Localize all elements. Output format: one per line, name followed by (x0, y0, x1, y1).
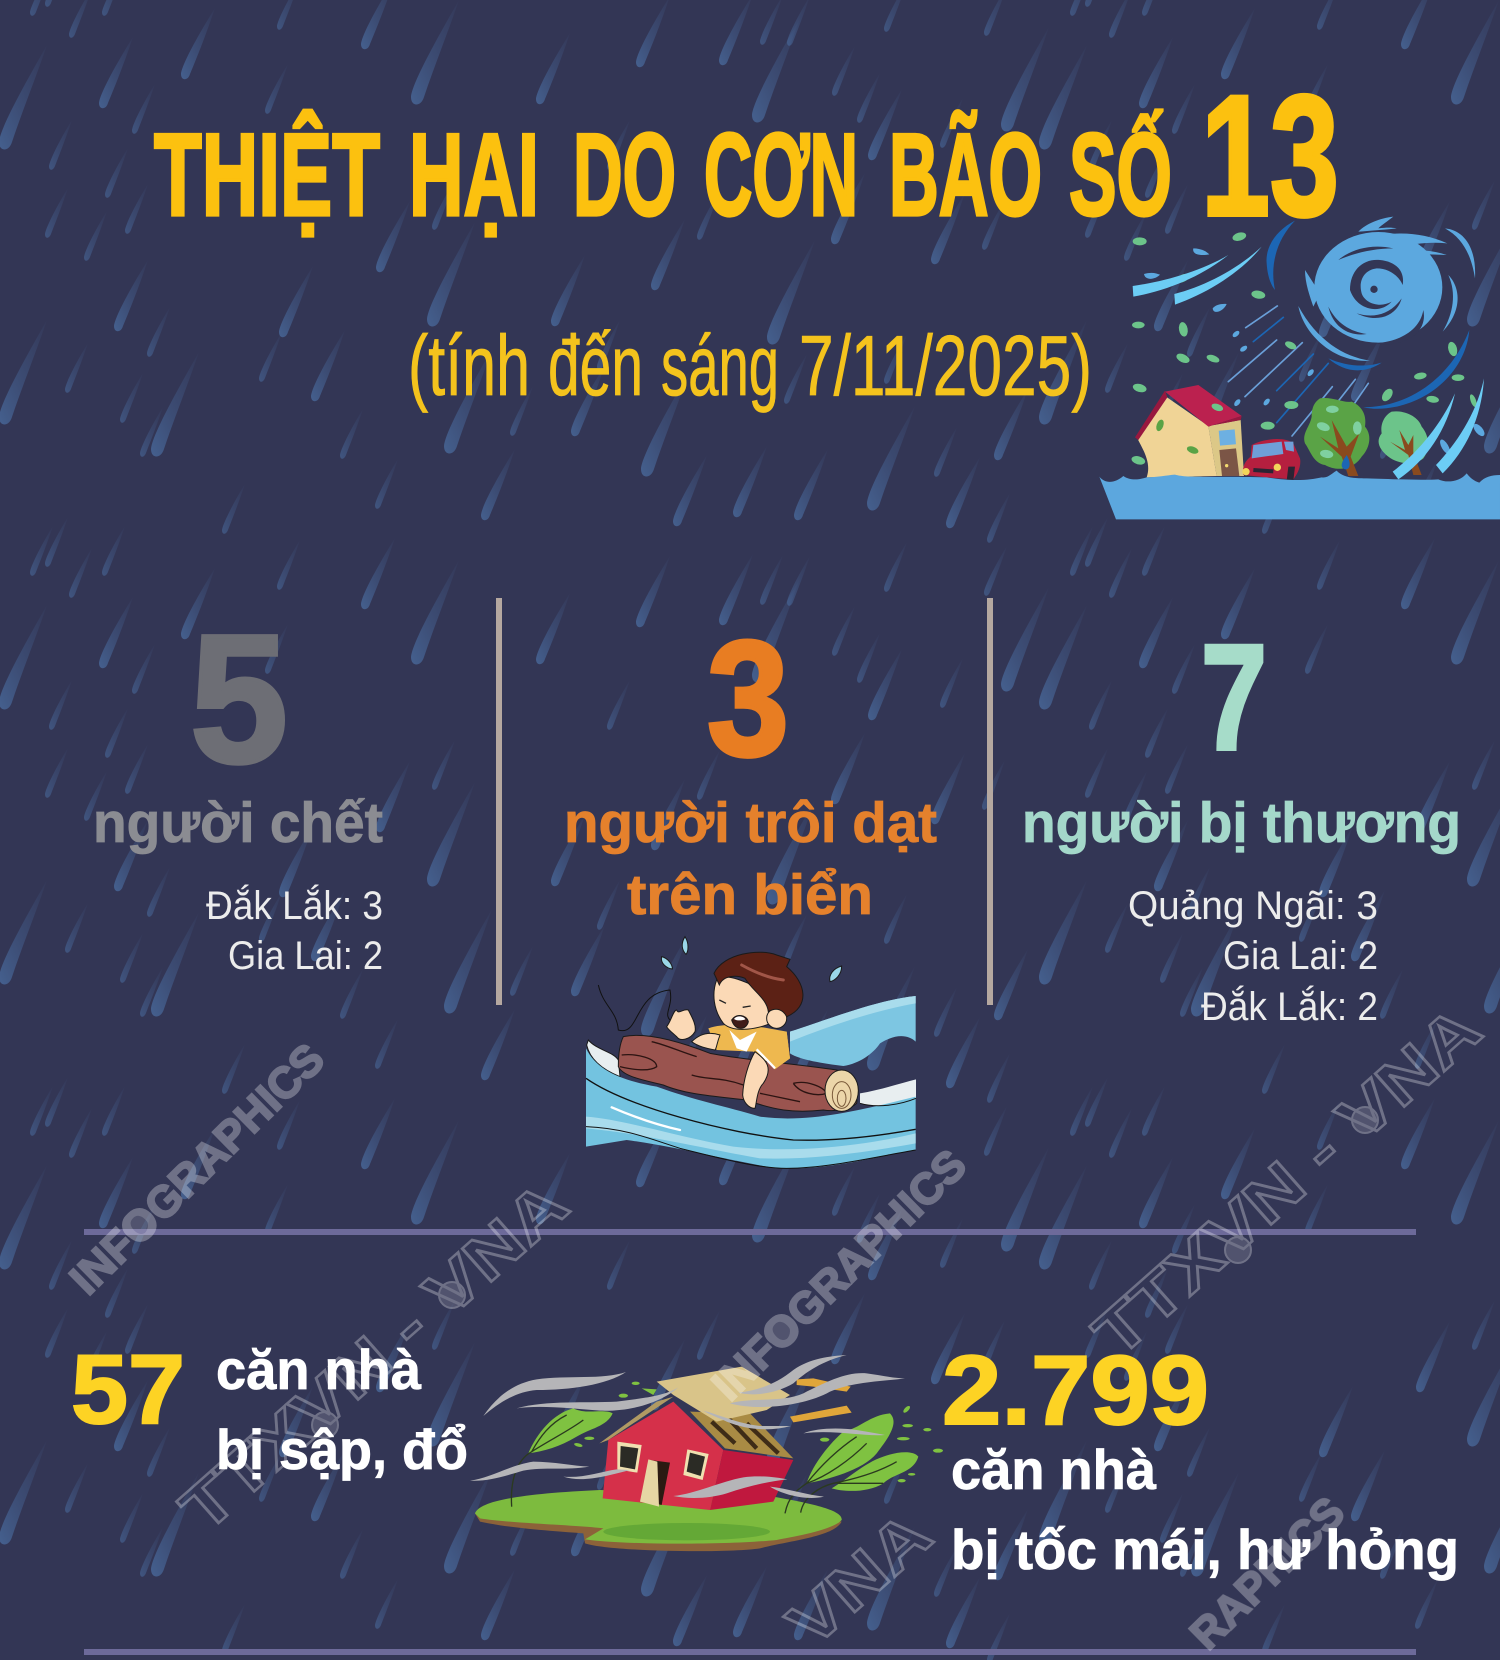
title: BÃO (889, 109, 1042, 240)
label (951, 1438, 1459, 1581)
ground grass (475, 1490, 842, 1544)
stat: collapsed houses (71, 1334, 468, 1481)
roof board (657, 1367, 790, 1422)
flying debris (574, 1382, 943, 1482)
number 5: 5 (190, 596, 288, 801)
subtitle: sáng (661, 319, 779, 414)
label: drifting at sea: trên biển (627, 863, 873, 927)
subtitle: đến (548, 319, 643, 414)
illustration: damaged house (470, 1355, 943, 1551)
wind strips (470, 1355, 905, 1498)
house walls (603, 1402, 723, 1510)
panel: deaths (93, 596, 383, 978)
province list (206, 883, 383, 978)
typhoon swirl (1298, 217, 1475, 361)
number 57: 57 (71, 1334, 185, 1444)
planks (790, 1378, 852, 1422)
watermarks (61, 992, 1494, 1660)
number 7: 7 (1201, 613, 1267, 781)
label: căn nhà (951, 1438, 1157, 1501)
illustration: boy on log (586, 937, 916, 1169)
divider right (987, 598, 993, 1005)
watermarks: RAPHICS (1181, 1488, 1354, 1659)
watermarks: VNA (774, 1497, 945, 1660)
title: 13 (1201, 60, 1339, 252)
label: injured: người bị thương (1022, 791, 1461, 855)
leaves (1131, 231, 1478, 466)
boy (692, 1033, 720, 1050)
left window (617, 1442, 642, 1473)
title (154, 60, 1339, 252)
red car (1242, 439, 1300, 481)
cyan wind streaks (1133, 247, 1484, 473)
log (618, 1035, 857, 1111)
province list: Quảng Ngãi: 3 (1128, 884, 1378, 928)
cyan wind streak over tree (1393, 393, 1455, 479)
flood water (1099, 471, 1500, 519)
subtitle (408, 319, 1092, 414)
shirt (708, 1025, 790, 1070)
left plant (511, 1408, 613, 1507)
separator bottom (84, 1649, 1416, 1655)
watermarks: INFOGRAPHICS (703, 1140, 976, 1410)
title: THIỆT (154, 109, 380, 240)
watermarks: TTXVN - VNA (167, 1167, 581, 1545)
water drops (1144, 248, 1487, 455)
title: DO (573, 109, 676, 240)
subtitle: (tính (408, 319, 530, 414)
hair squiggle (598, 985, 671, 1031)
ground soil (475, 1513, 842, 1551)
title: HẠI (409, 109, 539, 240)
subtitle: 7/11/2025) (799, 319, 1092, 414)
exposed roof beams (690, 1412, 793, 1458)
trees (1304, 398, 1428, 476)
panel: injured (1022, 613, 1461, 1029)
stat: damaged roofs (942, 1335, 1459, 1581)
number 3: 3 (707, 607, 789, 790)
label: drifting at sea: người trôi dạt (564, 791, 937, 855)
right window (683, 1449, 709, 1480)
right plants (785, 1413, 918, 1513)
sweat drops (661, 937, 842, 982)
door (640, 1459, 670, 1507)
watermarks: INFOGRAPHICS (61, 1034, 334, 1304)
divider left (496, 598, 502, 1005)
label: bị sập, đổ (216, 1418, 468, 1481)
province list: Đắk Lắk: 2 (1201, 984, 1378, 1029)
province list: Đắk Lắk: 3 (206, 883, 383, 928)
watermarks: TTXVN - VNA (1080, 992, 1494, 1370)
label (216, 1338, 468, 1481)
dark wind arcs (1267, 221, 1469, 409)
label: bị tốc mái, hư hỏng (951, 1518, 1459, 1581)
label: drifting at sea (564, 791, 937, 927)
panel: missing at sea (564, 607, 937, 1169)
tilted house (1135, 385, 1244, 477)
province list: Gia Lai: 2 (228, 934, 383, 978)
separator top (84, 1229, 1416, 1235)
title: CƠN (704, 109, 858, 240)
title: SỐ (1069, 109, 1172, 240)
province list (1128, 884, 1378, 1029)
label: deaths: người chết (93, 791, 383, 855)
house roof left eave (599, 1397, 673, 1443)
rain streak lines (1228, 306, 1368, 436)
number 2.799: 2.799 (942, 1335, 1209, 1445)
label: căn nhà (216, 1338, 422, 1401)
illustration: storm and flood (1099, 217, 1500, 519)
province list: Gia Lai: 2 (1223, 934, 1378, 978)
